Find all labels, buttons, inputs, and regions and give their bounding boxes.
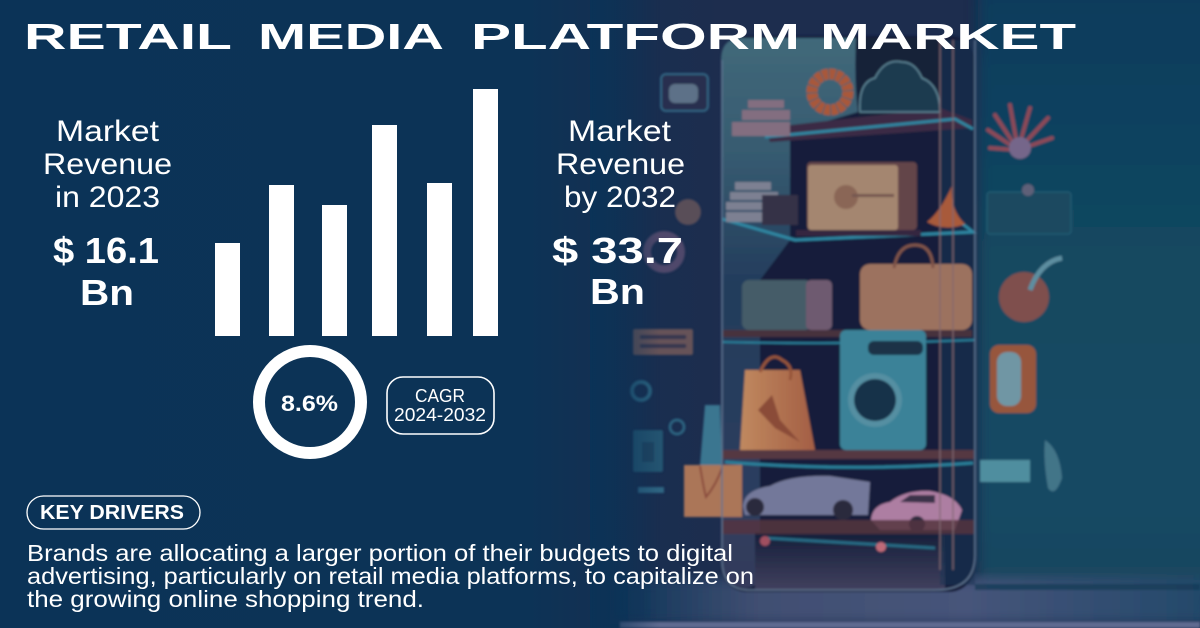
key drivers text [27, 540, 754, 612]
value: 16.1 Bn [53, 230, 159, 313]
cloud badge [860, 61, 940, 112]
right backdrop [978, 0, 1200, 600]
key drivers text: Brands are allocating a larger portion of their budgets to digital [27, 540, 733, 566]
orange ornament [927, 186, 965, 228]
stacked books upper [732, 100, 790, 136]
value: 16.1 Bn: $ 16.1 [53, 230, 159, 271]
label: market revenue in 2023: in 2023 [55, 181, 160, 214]
title: MARKET [820, 16, 1076, 57]
stacked books middle [726, 182, 794, 222]
grey car [743, 476, 870, 520]
grey suitcase [742, 280, 832, 330]
label: market revenue in 2023: Revenue [43, 148, 172, 181]
title: MEDIA [258, 16, 444, 57]
phone body [721, 36, 975, 592]
shelf 5 [722, 520, 974, 534]
CAGR ring [259, 351, 361, 453]
orange tote [740, 357, 815, 450]
paper bag [684, 465, 742, 517]
top right dark zone [856, 38, 940, 115]
value: 33.7 Bn [552, 230, 683, 312]
label: market revenue by 2032: Revenue [556, 148, 685, 181]
CAGR label box: 2024-2032 [394, 405, 486, 425]
CAGR label box: CAGR [415, 386, 465, 406]
panel: market revenue 2023 [43, 115, 172, 313]
key drivers text: the growing online shopping trend. [27, 586, 424, 612]
label: market revenue in 2023: Market [56, 115, 160, 148]
fade into left background [590, 0, 660, 628]
value: 33.7 Bn: $ 33.7 [552, 230, 683, 271]
label: market revenue by 2032: Market [568, 115, 672, 148]
safe case [796, 162, 921, 236]
glass left column [721, 38, 858, 588]
right side decorations [980, 105, 1071, 491]
pink car [871, 491, 962, 532]
label: market revenue by 2032 [556, 115, 685, 214]
value: 33.7 Bn: Bn [590, 271, 645, 312]
phone outline [722, 40, 975, 590]
title [24, 16, 1076, 57]
teal line [722, 340, 975, 343]
shelf 2 [722, 218, 973, 240]
CAGR ring: 8.6% [281, 391, 338, 416]
title: RETAIL [24, 16, 232, 57]
illustration: smartphone with retail shelves [610, 0, 1200, 628]
key drivers text: advertising, particularly on retail media platforms, to capitalize on [27, 563, 754, 589]
shelf 1 [765, 108, 973, 142]
value: 16.1 Bn: Bn [80, 272, 134, 313]
key drivers pill: KEY DRIVERS [40, 502, 184, 524]
wreath [812, 74, 848, 110]
key drivers pill [27, 496, 200, 529]
hanging blue item [700, 405, 722, 465]
shelf 4 [722, 450, 974, 459]
phone lower interior [755, 532, 945, 590]
bar chart [215, 89, 498, 336]
washing machine [840, 330, 926, 450]
panel: market revenue 2032 [552, 115, 685, 312]
label: market revenue in 2023 [43, 115, 172, 214]
brown handbag [860, 245, 972, 330]
floor [610, 578, 1200, 628]
left side icons [632, 74, 708, 493]
CAGR label box [387, 377, 494, 434]
shelf 3 [722, 330, 972, 337]
title: PLATFORM [471, 16, 800, 57]
label: market revenue by 2032: by 2032 [564, 181, 676, 214]
